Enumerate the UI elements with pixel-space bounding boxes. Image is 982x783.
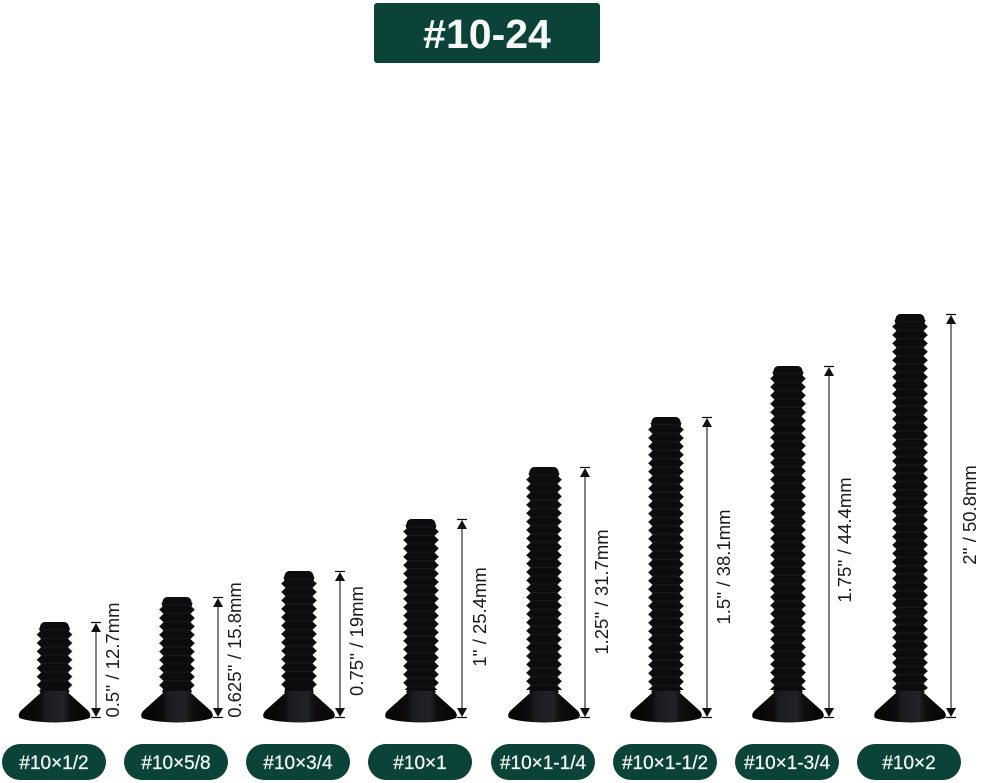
dimension label 1.75 inch: 1.75'' / 44.4mm — [834, 477, 855, 603]
size pill #10×1-1/4 — [491, 744, 595, 780]
size pill #10×1 — [368, 744, 472, 780]
size pill #10×3/4 — [246, 744, 350, 780]
dimension arrow 0.75 inch — [335, 572, 345, 718]
size pill #10×5/8 — [124, 744, 228, 780]
size pill #10×1-3/4 — [735, 744, 839, 780]
dimension label 0.625 inch: 0.625'' / 15.8mm — [224, 582, 245, 718]
dimension arrow 0.625 inch — [213, 598, 223, 718]
size pill #10×2 — [857, 744, 961, 780]
dimension arrow 0.5 inch — [91, 622, 101, 718]
size pill #10×1: #10×1 — [393, 753, 447, 774]
dimension label 0.5 inch: 0.5'' / 12.7mm — [102, 602, 123, 718]
size pill #10×5/8: #10×5/8 — [141, 753, 211, 774]
size pill #10×1-1/2: #10×1-1/2 — [622, 753, 708, 774]
dimension label 1 inch: 1'' / 25.4mm — [469, 567, 490, 667]
size pill #10×3/4: #10×3/4 — [263, 753, 333, 774]
screw 5/8 inch — [141, 597, 213, 722]
dimension label 1.5 inch: 1.5'' / 38.1mm — [713, 509, 734, 625]
dimension arrow 2 inch — [946, 314, 956, 718]
dimension arrow 1.5 inch — [702, 418, 712, 718]
size pill #10×1-3/4: #10×1-3/4 — [744, 753, 830, 774]
dimension label 2 inch: 2'' / 50.8mm — [959, 465, 980, 565]
dimension arrow 1.25 inch — [580, 468, 590, 718]
title badge: #10-24: #10-24 — [423, 11, 551, 57]
size pill #10×2: #10×2 — [882, 753, 936, 774]
screw 1/2 inch — [19, 622, 90, 722]
screw 3/4 inch — [263, 571, 335, 722]
screw 1 inch — [385, 519, 457, 722]
size pill #10×1-1/2 — [613, 744, 717, 780]
size pill #10×1/2: #10×1/2 — [19, 753, 89, 774]
dimension arrow 1 inch — [457, 520, 467, 718]
dimension arrow 1.75 inch — [824, 366, 834, 718]
size pill #10×1/2 — [2, 744, 106, 780]
screw 1-1/4 inch — [508, 467, 580, 722]
size pill #10×1-1/4: #10×1-1/4 — [500, 753, 586, 774]
dimension label 0.75 inch: 0.75'' / 19mm — [346, 586, 367, 696]
dimension label 1.25 inch: 1.25'' / 31.7mm — [591, 529, 612, 655]
screw 2 inch — [874, 314, 946, 722]
title badge: #10-24 — [374, 3, 600, 63]
screw 1-1/2 inch — [630, 417, 702, 722]
screw 1-3/4 inch — [752, 366, 824, 722]
